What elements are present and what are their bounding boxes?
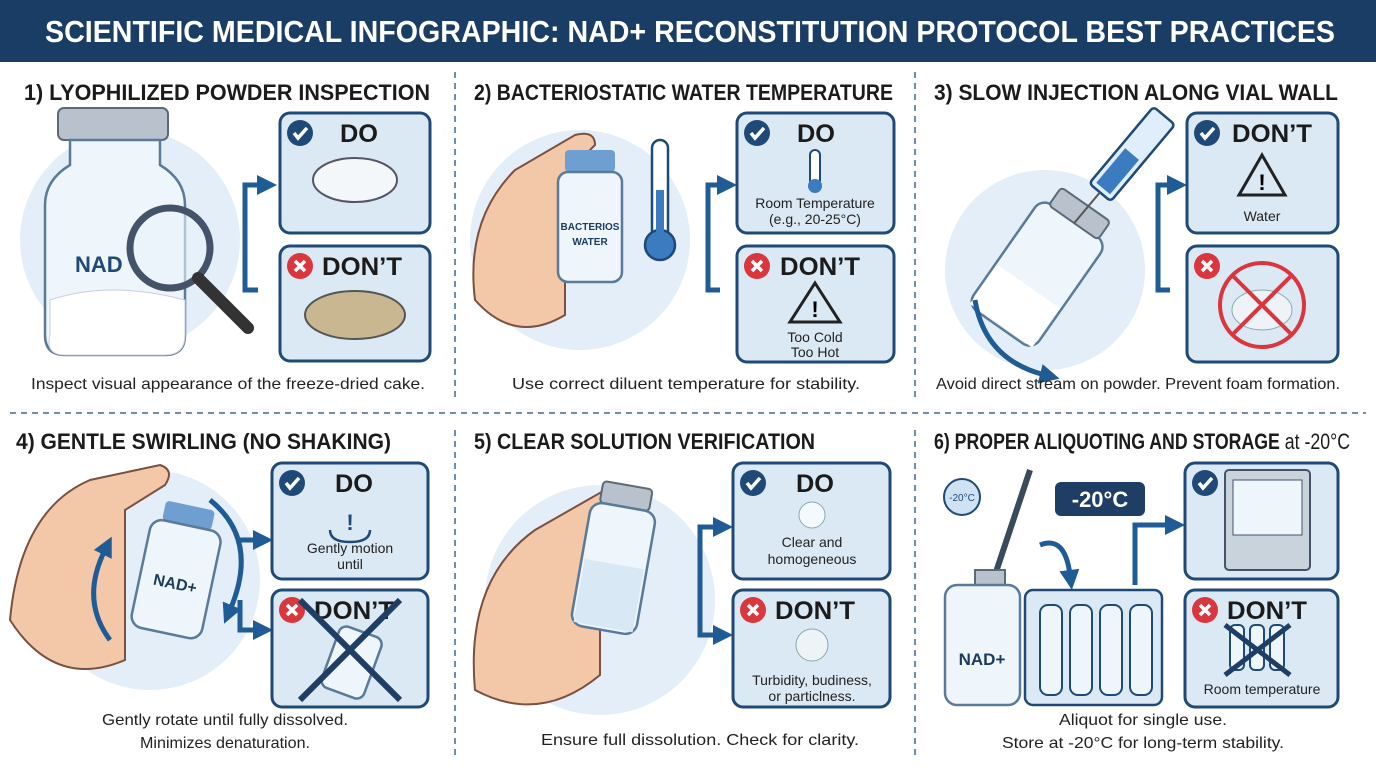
DON'T box: DON’T bbox=[322, 253, 402, 281]
DON'T box: DON’T bbox=[1227, 597, 1307, 625]
illustration: hand with vial and thermometer bbox=[470, 130, 690, 350]
DON'T box: DON’T bbox=[775, 597, 855, 625]
panel 1 bbox=[20, 80, 430, 393]
panel 5 bbox=[474, 429, 890, 749]
panel 6: 6) PROPER ALIQUOTING AND STORAGE at -20°C bbox=[934, 429, 1350, 454]
DO box: ! bbox=[346, 510, 354, 535]
DO box bbox=[1185, 463, 1338, 579]
DO box: Clear and bbox=[782, 534, 842, 550]
caption: Ensure full dissolution. Check for clarity. bbox=[541, 732, 859, 749]
illustration: hand holding clear vial bbox=[474, 480, 715, 715]
caption bbox=[102, 712, 348, 752]
DON'T box bbox=[280, 246, 430, 361]
DON'T box (water): Water bbox=[1244, 208, 1281, 224]
panel 6 bbox=[934, 429, 1350, 752]
DON'T box (water): ! bbox=[1258, 170, 1266, 195]
illustration: pipette, NAD+ vial, aliquot tubes: -20°C bbox=[949, 493, 975, 504]
illustration: hand swirling vial bbox=[10, 465, 260, 690]
DO box bbox=[272, 463, 428, 579]
panel 5: 5) CLEAR SOLUTION VERIFICATION bbox=[474, 429, 815, 454]
DON'T box: ! bbox=[811, 297, 819, 322]
panel 4: 4) GENTLE SWIRLING (NO SHAKING) bbox=[16, 429, 391, 454]
caption: Use correct diluent temperature for stability. bbox=[512, 376, 860, 393]
panel 2 bbox=[470, 80, 894, 393]
caption: Inspect visual appearance of the freeze-dried cake. bbox=[31, 376, 425, 393]
DO box bbox=[737, 113, 894, 233]
DON'T box: DON’T bbox=[314, 597, 394, 625]
panel 3: 3) SLOW INJECTION ALONG VIAL WALL bbox=[934, 80, 1338, 105]
caption: Gently rotate until fully dissolved. bbox=[102, 712, 348, 729]
panel 4 bbox=[10, 429, 428, 752]
DO box bbox=[733, 463, 890, 579]
illustration: NAD vial with magnifier bbox=[20, 108, 248, 355]
illustration: pipette, NAD+ vial, aliquot tubes bbox=[944, 470, 1170, 705]
DON'T box bbox=[1185, 590, 1338, 707]
DO box: homogeneous bbox=[768, 551, 856, 567]
caption: Avoid direct stream on powder. Prevent foam formation. bbox=[936, 376, 1340, 393]
DON'T box (water): DON’T bbox=[1232, 120, 1312, 148]
title bar bbox=[0, 0, 1376, 62]
illustration: hand with vial and thermometer: WATER bbox=[572, 237, 608, 248]
caption: Minimizes denaturation. bbox=[140, 735, 310, 752]
caption: Aliquot for single use. bbox=[1059, 712, 1227, 729]
DO box: DO bbox=[797, 120, 835, 148]
DON'T box: Too Cold bbox=[787, 329, 843, 345]
DO box: Gently motion bbox=[307, 540, 393, 556]
DO box: Room Temperature bbox=[755, 195, 875, 211]
DON'T box (foam) bbox=[1187, 246, 1338, 362]
panel 1: 1) LYOPHILIZED POWDER INSPECTION bbox=[24, 80, 430, 105]
DON'T box bbox=[272, 590, 428, 707]
DON'T box: or particlness. bbox=[768, 688, 856, 704]
panel 3 bbox=[934, 80, 1340, 393]
illustration: hand swirling vial: NAD+ bbox=[152, 572, 198, 597]
DO box: DO bbox=[796, 470, 834, 498]
DON'T box bbox=[737, 246, 894, 362]
illustration: syringe into tilted vial bbox=[945, 107, 1175, 375]
caption bbox=[1002, 712, 1284, 752]
panel 2: 2) BACTERIOSTATIC WATER TEMPERATURE bbox=[474, 80, 893, 105]
DO box: DO bbox=[335, 470, 373, 498]
illustration: pipette, NAD+ vial, aliquot tubes: NAD+ bbox=[959, 650, 1005, 669]
illustration: NAD vial with magnifier: NAD bbox=[75, 252, 123, 277]
DON'T box: Room temperature bbox=[1204, 681, 1321, 697]
DO box: (e.g., 20-25°C) bbox=[769, 211, 861, 227]
DO box: DO bbox=[340, 120, 378, 148]
DON'T box (water) bbox=[1187, 113, 1338, 233]
DON'T box: DON’T bbox=[780, 253, 860, 281]
DO box: until bbox=[337, 556, 363, 572]
illustration: pipette, NAD+ vial, aliquot tubes: -20°C bbox=[1072, 487, 1128, 512]
illustration: hand with vial and thermometer: BACTERIOS bbox=[561, 222, 620, 233]
DON'T box: Turbidity, budiness, bbox=[752, 672, 872, 688]
caption: Store at -20°C for long-term stability. bbox=[1002, 735, 1284, 752]
DO box bbox=[280, 113, 430, 233]
DON'T box: Too Hot bbox=[791, 344, 839, 360]
DON'T box bbox=[733, 590, 890, 707]
